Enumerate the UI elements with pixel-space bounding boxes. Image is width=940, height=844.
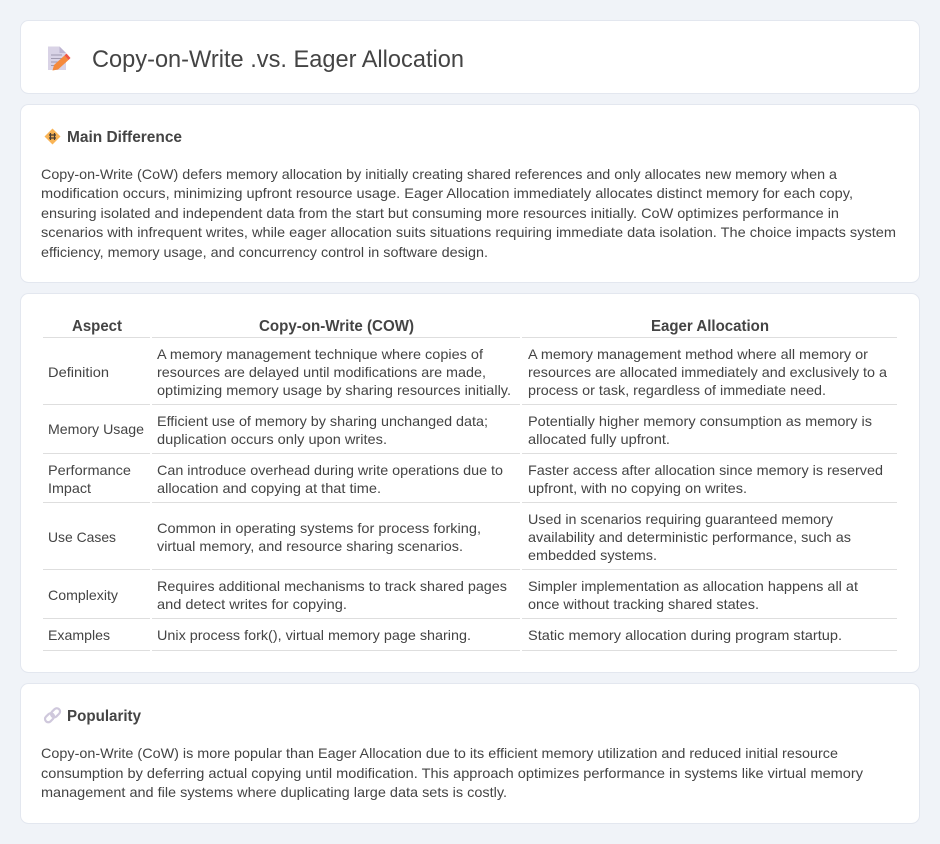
row: performance impact: Impact — [48, 480, 91, 496]
row: definition: A memory management technique where copies of — [157, 346, 483, 362]
table header: Eager Allocation — [651, 318, 769, 335]
row: use cases: Common in operating systems for process forking, — [157, 520, 481, 536]
row: use cases — [48, 511, 851, 563]
row: definition: process or task, regardless of immediate need. — [528, 382, 826, 398]
row: use cases: availability and deterministic performance, such as — [528, 529, 851, 545]
row: complexity — [48, 578, 858, 612]
text block: main difference: ensuring isolated and independent data from the start but consuming more resources initially. CoW optimizes performance in — [41, 205, 839, 221]
icon: document with pencil — [48, 46, 70, 70]
table header: Copy-on-Write (COW) — [259, 318, 414, 335]
row: performance impact: Performance — [48, 462, 131, 478]
text block: main difference: Copy-on-Write (CoW) defers memory allocation by initially creating shared references and only allocates new memory when a — [41, 166, 837, 182]
text block: popularity: management and file systems where duplicating large data sets is costly. — [41, 784, 507, 800]
row: use cases: Use Cases — [48, 529, 116, 545]
row: memory usage: Efficient use of memory by sharing unchanged data; — [157, 413, 488, 429]
text block: main difference — [41, 166, 896, 260]
row: complexity: Complexity — [48, 587, 118, 603]
text block: main difference: scenarios with infrequent writes, while eager allocation suits situations requiring immediate data isolation. The choice impacts system — [41, 224, 896, 240]
row: performance impact: Can introduce overhead during write operations due to — [157, 462, 503, 478]
row: definition — [48, 346, 887, 398]
heading: main difference: Main Difference — [67, 129, 182, 146]
title text: Copy-on-Write .vs. Eager Allocation — [92, 46, 464, 73]
row: memory usage: Memory Usage — [48, 421, 144, 437]
row: examples: Static memory allocation during program startup. — [528, 627, 842, 643]
icon: warning diamond — [44, 128, 60, 144]
text block: main difference: modification occurs, minimizing upfront resource usage. Eager Allocation immediately allocates distinct memory for each copy, — [41, 185, 853, 201]
row: performance impact: upfront, with no copying on writes. — [528, 480, 747, 496]
row: complexity: Simpler implementation as allocation happens all at — [528, 578, 858, 594]
row: examples — [48, 627, 842, 643]
row: examples: Examples — [48, 627, 110, 643]
panel: main difference — [20, 104, 920, 282]
row: definition: resources are delayed until modifications are made, — [157, 364, 486, 380]
heading: popularity: Popularity — [67, 708, 141, 725]
row: definition: A memory management method where all memory or — [528, 346, 868, 362]
row: performance impact — [48, 462, 883, 496]
row: definition: optimizing memory usage by sharing resources initially. — [157, 382, 511, 398]
text block: popularity — [41, 745, 863, 800]
text block: main difference: efficiency, memory usage, and concurrency control in software design. — [41, 244, 488, 260]
row: performance impact: allocation and copying at that time. — [157, 480, 381, 496]
panel: popularity — [20, 684, 920, 824]
row: memory usage: duplication occurs only upon writes. — [157, 431, 387, 447]
panel: title — [20, 20, 920, 94]
row: memory usage: Potentially higher memory consumption as memory is — [528, 413, 872, 429]
row: definition: resources are allocated immediately and exclusively to a — [528, 364, 887, 380]
row: use cases: virtual memory, and resource sharing scenarios. — [157, 538, 463, 554]
icon: chain link — [44, 707, 61, 724]
row: examples: Unix process fork(), virtual memory page sharing. — [157, 627, 471, 643]
row: memory usage: allocated fully upfront. — [528, 431, 670, 447]
row: use cases: embedded systems. — [528, 547, 657, 563]
row: memory usage — [48, 413, 872, 447]
text block: popularity: Copy-on-Write (CoW) is more popular than Eager Allocation due to its efficient memory utilization and reduced initial resource — [41, 745, 838, 761]
row: use cases: Used in scenarios requiring guaranteed memory — [528, 511, 833, 527]
row: performance impact: Faster access after allocation since memory is reserved — [528, 462, 883, 478]
row: complexity: once without tracking shared states. — [528, 596, 759, 612]
row: complexity: Requires additional mechanisms to track shared pages — [157, 578, 507, 594]
text block: popularity: consumption by deferring actual copying until modification. This approach optimizes performance in systems like virtual memory — [41, 765, 863, 781]
row: definition: Definition — [48, 364, 109, 380]
table header: Aspect — [72, 318, 123, 335]
table header — [72, 318, 769, 335]
row: complexity: and detect writes for copying. — [157, 596, 347, 612]
panel: comparison table — [20, 294, 920, 672]
